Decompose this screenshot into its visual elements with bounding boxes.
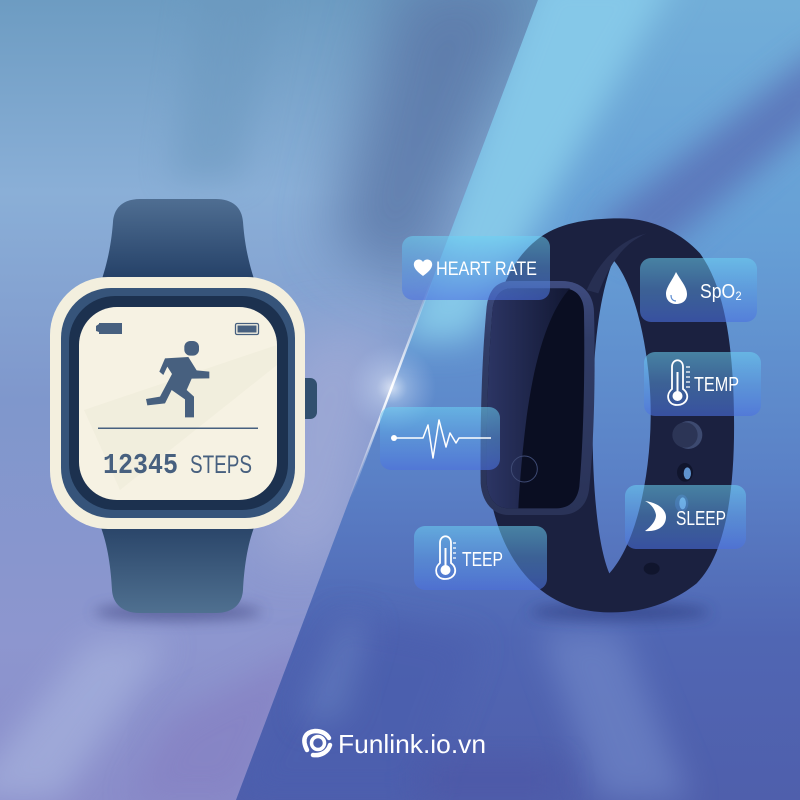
step count: 12345 xyxy=(103,449,178,482)
card: SpO2: SpO₂ xyxy=(700,281,742,303)
card: heart rate xyxy=(402,236,550,300)
icon: thermometer xyxy=(436,536,456,579)
card: teep xyxy=(414,526,547,590)
steps label: STEPS xyxy=(190,451,252,479)
icon: heart xyxy=(414,259,432,276)
band stud xyxy=(672,421,702,449)
band module xyxy=(481,281,595,515)
screen gloss xyxy=(487,288,570,508)
fitness band xyxy=(481,218,734,612)
background: left panel xyxy=(0,0,532,800)
watch screen xyxy=(79,307,277,500)
strap highlight xyxy=(587,233,647,293)
module button xyxy=(511,456,537,482)
icon: ECG trace xyxy=(391,420,491,458)
card: sleep xyxy=(625,485,746,549)
watch case xyxy=(50,277,305,529)
watch strap bottom xyxy=(100,525,255,613)
watch strap top xyxy=(101,199,255,282)
card: sleep: SLEEP xyxy=(676,508,726,530)
light flare xyxy=(348,280,436,498)
module screen xyxy=(487,288,584,508)
divider xyxy=(98,428,258,429)
card: temp: TEMP xyxy=(694,374,739,396)
icon: Funlink mark xyxy=(304,731,330,755)
signal indicator xyxy=(96,323,122,334)
card: ECG pulse xyxy=(380,407,500,470)
icon: moon xyxy=(645,501,666,531)
icon: thermometer xyxy=(668,360,690,405)
band strap xyxy=(493,218,734,612)
icon: water drop xyxy=(666,272,687,304)
background: right panel xyxy=(236,0,800,800)
brand name: Funlink.io.vn xyxy=(338,729,486,759)
card: temp xyxy=(644,352,761,416)
band shadow xyxy=(530,604,710,620)
brand logo xyxy=(304,729,486,759)
card: teep: TEEP xyxy=(462,549,503,571)
card: heart rate: HEART RATE xyxy=(436,258,537,280)
watch bezel xyxy=(61,288,295,518)
smartwatch xyxy=(50,199,317,620)
battery icon xyxy=(236,324,258,334)
icon: running figure xyxy=(146,341,209,417)
watch shadow xyxy=(94,604,262,620)
watch crown xyxy=(305,378,317,419)
card: SpO2 xyxy=(640,258,757,322)
band holes xyxy=(644,463,693,575)
